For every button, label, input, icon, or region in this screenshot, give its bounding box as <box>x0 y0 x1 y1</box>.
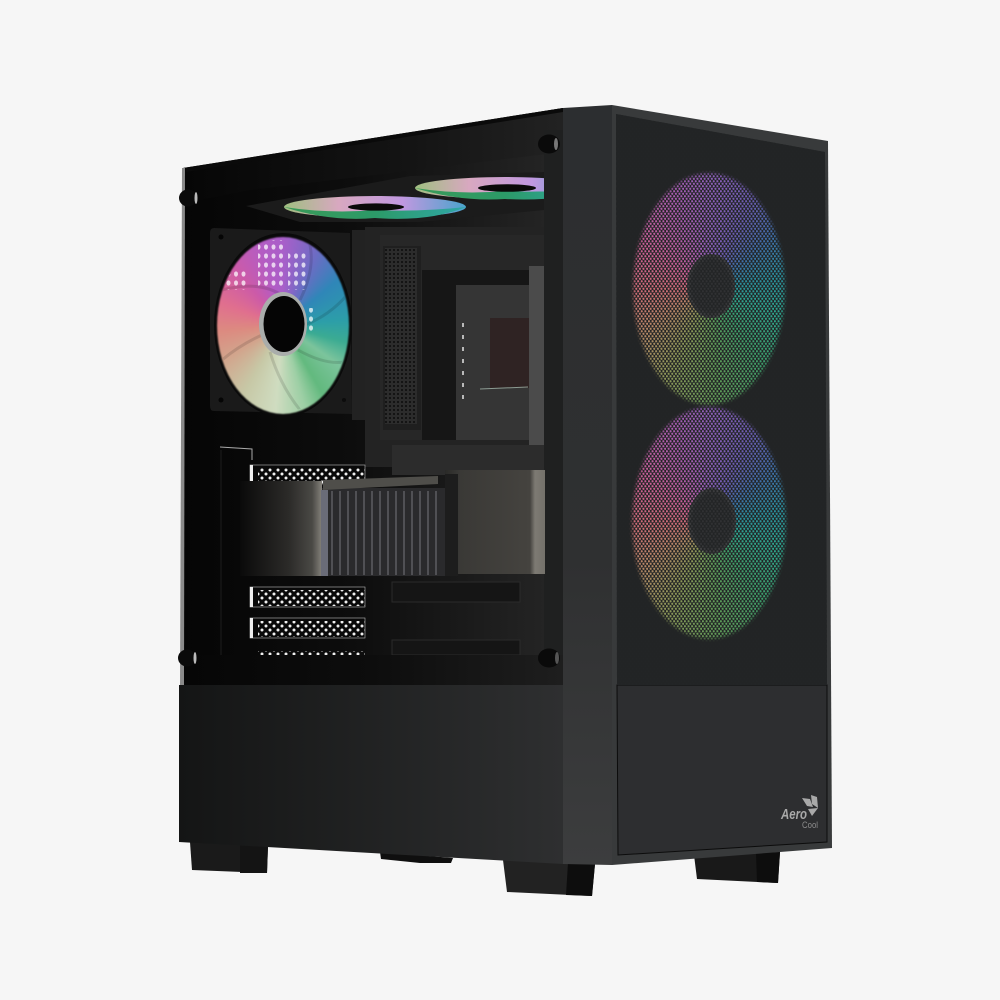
front mesh backing <box>616 114 827 685</box>
perforated mesh <box>630 170 788 642</box>
front panel lower plate <box>617 685 827 855</box>
fan hubs behind mesh <box>687 254 736 554</box>
blade edges <box>222 245 347 410</box>
glass side panel <box>180 108 563 686</box>
lower shroud <box>179 685 563 864</box>
feet <box>190 842 780 896</box>
fan grille dots <box>222 240 316 332</box>
rear fan details and top fans <box>178 105 832 865</box>
top fans <box>284 177 544 219</box>
front mesh and logo <box>630 170 818 828</box>
PCI slot covers <box>220 447 365 655</box>
logo: Cool <box>802 820 818 831</box>
front panel frame <box>612 105 832 865</box>
side edge strip <box>563 105 612 865</box>
PCIe slots <box>392 582 520 655</box>
fan hub <box>259 292 307 356</box>
rear RGB fan blades <box>217 237 349 414</box>
front RGB fan upper <box>633 173 785 405</box>
rear fan frame <box>210 228 365 420</box>
thumb screws <box>178 134 560 668</box>
front RGB fan lower <box>632 407 786 639</box>
graphics card <box>240 470 545 576</box>
top fan tray <box>246 172 544 222</box>
glass bottom rail <box>184 655 563 685</box>
logo <box>780 795 818 831</box>
motherboard <box>365 227 544 475</box>
logo: Aero <box>780 806 807 823</box>
